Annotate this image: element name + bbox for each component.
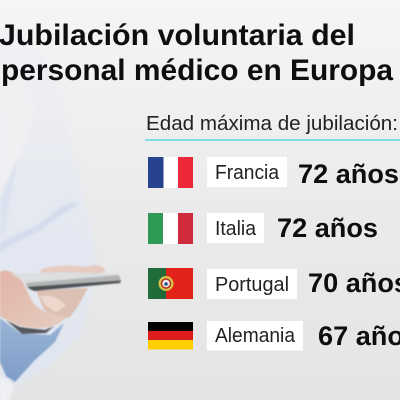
label: Francia: Francia — [215, 162, 280, 184]
cyan underline — [145, 139, 400, 141]
label: Francia — [207, 157, 287, 187]
row: Italia — [148, 213, 378, 244]
value: 72 años: 72 años — [277, 213, 378, 243]
phone top face — [11, 272, 121, 284]
title: Jubilación voluntaria del — [0, 19, 355, 52]
label: Italia — [207, 213, 264, 243]
label: Portugal: Portugal — [215, 274, 289, 296]
title — [0, 19, 393, 87]
top finger — [40, 265, 106, 278]
sleeve cuff — [0, 318, 64, 382]
icon: flag of Italy — [148, 213, 193, 244]
subheading: Edad máxima de jubilación: — [146, 113, 398, 135]
label: Alemania: Alemania — [215, 325, 296, 347]
fingers and hand — [0, 270, 66, 328]
photo: doctor holding a phone — [0, 30, 121, 400]
icon: flag of France — [148, 157, 193, 188]
icon: flag of Germany — [148, 322, 193, 350]
icon: flag of Portugal — [148, 268, 193, 299]
coat body — [0, 30, 97, 390]
value: 72 años: 72 años — [298, 159, 399, 189]
label: Portugal — [207, 269, 297, 299]
label: Alemania — [207, 321, 303, 350]
row: Alemania — [148, 321, 400, 351]
coat folds — [0, 158, 18, 240]
bottom sleeve white — [0, 375, 14, 400]
palm — [36, 288, 88, 320]
row: Francia — [148, 157, 399, 189]
coat lapel — [0, 60, 35, 195]
row: Portugal — [148, 268, 400, 299]
phone dark edge — [27, 280, 121, 291]
title: personal médico en Europa — [1, 54, 393, 87]
watch strap shadow — [6, 320, 54, 334]
label: Italia: Italia — [215, 218, 257, 240]
